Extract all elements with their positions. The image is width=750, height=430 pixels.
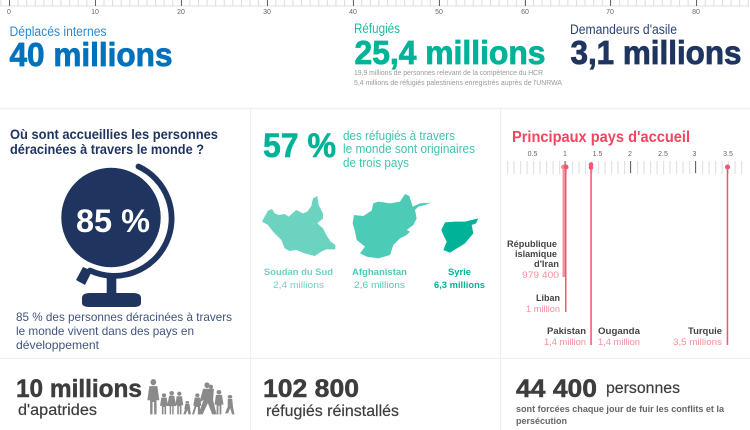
label: Pakistan: 1,4 million xyxy=(544,337,586,348)
top ruler scale: 40 xyxy=(349,9,357,16)
top ruler scale xyxy=(0,0,750,16)
stat: stateless people: 10 millions xyxy=(16,375,142,403)
heading: déracinées à travers le monde ? xyxy=(10,142,204,157)
map: Syria xyxy=(441,218,478,253)
scale xyxy=(506,151,744,174)
scale: 0.5 xyxy=(528,151,537,158)
headline description: le monde sont originaires xyxy=(343,142,475,156)
marker: Pakistan and Uganda xyxy=(589,162,593,345)
top ruler scale: 30 xyxy=(263,9,271,16)
map: Afghanistan xyxy=(353,194,431,258)
stat: refugees: 25,4 millions xyxy=(354,35,546,72)
label: Afghanistan xyxy=(352,267,407,291)
stat: internally displaced: Déplacés internes xyxy=(10,24,107,39)
top ruler scale: 10 xyxy=(91,9,99,16)
label: Turkey xyxy=(673,326,722,348)
scale: 2.5 xyxy=(658,151,668,158)
top ruler scale: 0 xyxy=(7,9,11,16)
headline description: des réfugiés à travers xyxy=(343,129,455,143)
label: South Sudan xyxy=(264,267,333,291)
stat: asylum seekers: 3,1 millions xyxy=(570,35,742,72)
label: Lebanon: Liban xyxy=(536,293,560,303)
top ruler scale: 50 xyxy=(435,9,443,16)
top ruler scale: 60 xyxy=(521,9,529,16)
icon: globe 85 % xyxy=(61,166,172,307)
label: Iran: République xyxy=(507,239,557,249)
label: Turkey: Turquie xyxy=(688,326,722,336)
label: Uganda: Ouganda xyxy=(598,326,641,336)
stat: people forced to flee daily: personnes xyxy=(606,380,680,397)
marker: Turkey xyxy=(725,164,730,345)
scale: 3 xyxy=(693,151,697,158)
stat: resettled refugees xyxy=(263,375,399,420)
panel: where displaced people are hosted xyxy=(10,127,232,352)
stat: people forced to flee daily: persécution xyxy=(516,416,567,426)
scale: 1 xyxy=(563,151,567,158)
panel grid lines xyxy=(0,108,750,430)
stat: asylum seekers: Demandeurs d'asile xyxy=(570,22,677,37)
label: Pakistan: Pakistan xyxy=(547,326,586,336)
description: développement xyxy=(16,338,100,352)
icon: globe 85 %: 85 % xyxy=(76,203,150,239)
label: Syria: Syrie xyxy=(448,267,471,278)
stat: resettled refugees: réfugiés réinstallés xyxy=(266,403,399,420)
label: Uganda: 1,4 million xyxy=(598,337,640,348)
stat: internally displaced: 40 millions xyxy=(10,37,172,74)
stat: refugees: 5,4 millions de réfugiés palestiniens enregistrés auprès de l'UNRWA xyxy=(354,80,562,87)
panel: main host countries xyxy=(506,129,744,348)
label: Turkey: 3,5 millions xyxy=(673,337,722,348)
marker: Lebanon xyxy=(564,164,568,312)
label: South Sudan: Soudan du Sud xyxy=(264,267,333,278)
heading xyxy=(10,127,218,157)
stat: resettled refugees: 102 800 xyxy=(263,375,359,403)
stat: refugees xyxy=(354,21,562,87)
label: Uganda xyxy=(598,326,641,348)
icon: group of people silhouettes xyxy=(147,379,234,414)
label: Afghanistan: Afghanistan xyxy=(352,267,407,278)
description: 85 % des personnes déracinées à travers xyxy=(16,310,232,324)
label: Pakistan xyxy=(544,326,586,348)
label: South Sudan: 2,4 millions xyxy=(273,280,324,291)
marker: Iran xyxy=(561,164,566,277)
stat: stateless people xyxy=(16,375,142,419)
description: le monde vivent dans des pays en xyxy=(16,324,194,338)
stat: people forced to flee daily xyxy=(516,375,725,426)
heading: Principaux pays d'accueil xyxy=(512,129,690,146)
label: Iran xyxy=(507,239,559,281)
headline 57 %: 57 % xyxy=(263,127,336,165)
heading: Où sont accueillies les personnes xyxy=(10,127,218,142)
top ruler scale: 80 xyxy=(692,9,700,16)
label: Iran: 979 400 xyxy=(522,270,559,281)
scale: 2 xyxy=(628,151,632,158)
label: Iran: islamique xyxy=(515,249,557,259)
top ruler scale: 70 xyxy=(606,9,614,16)
stat: people forced to flee daily: 44 400 xyxy=(516,375,597,403)
label: Iran: d'Iran xyxy=(534,259,559,269)
stat: refugees: 19,9 millions de personnes relevant de la compétence du HCR xyxy=(354,70,543,77)
headline description xyxy=(343,129,475,170)
label: Lebanon: 1 million xyxy=(526,304,560,315)
scale: 1.5 xyxy=(593,151,602,158)
description xyxy=(16,310,232,352)
label: Syria xyxy=(434,267,485,291)
stat: stateless people: d'apatrides xyxy=(18,402,97,419)
label: Syria: 6,3 millions xyxy=(434,280,485,291)
headline description: de trois pays xyxy=(343,156,409,170)
stat: people forced to flee daily: sont forcées chaque jour de fuir les conflits et la xyxy=(516,404,725,414)
map: South Sudan xyxy=(262,196,335,256)
panel: top three origin countries xyxy=(262,127,485,291)
top ruler scale: 20 xyxy=(177,9,185,16)
label: Lebanon xyxy=(526,293,560,315)
scale: 3.5 xyxy=(723,151,733,158)
stat: refugees: Réfugiés xyxy=(354,21,400,36)
label: Afghanistan: 2,6 millions xyxy=(354,280,405,291)
